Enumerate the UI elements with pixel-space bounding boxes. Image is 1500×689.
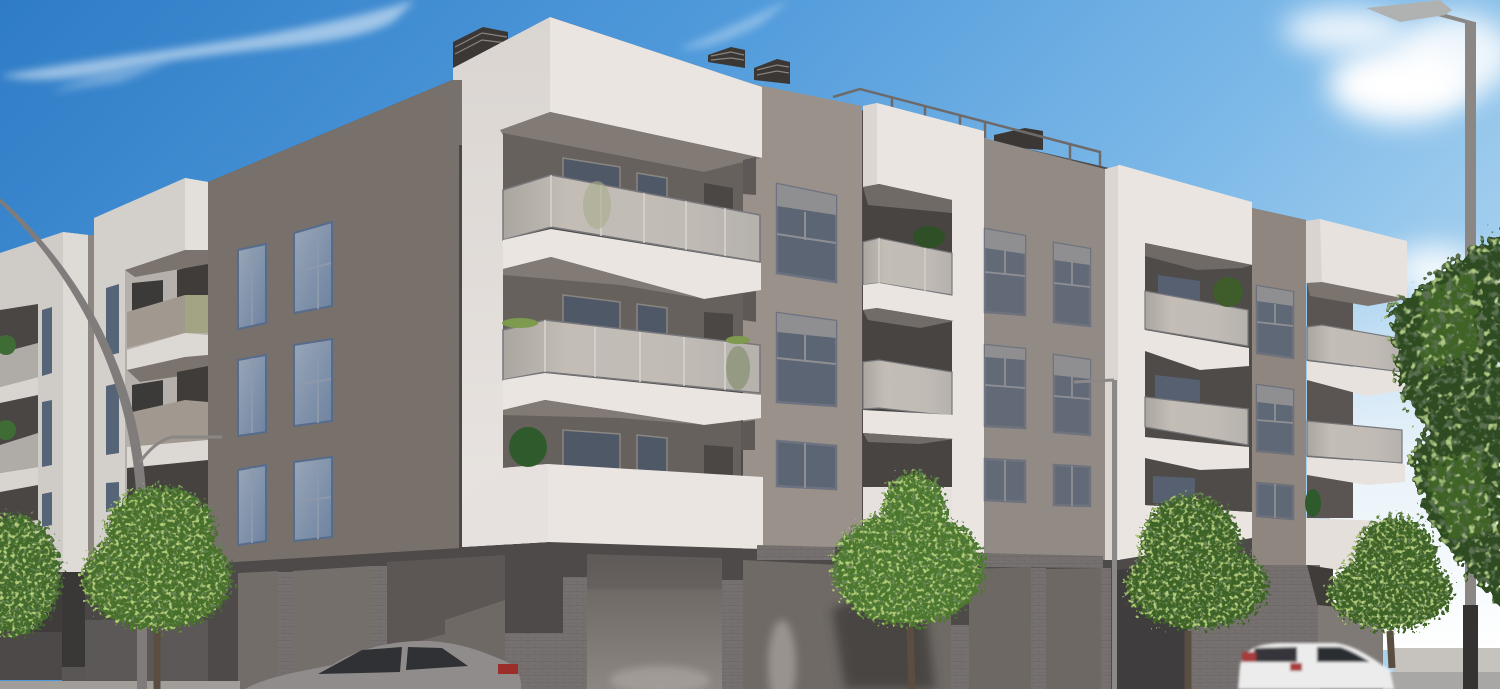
white column and top block xyxy=(453,17,762,548)
icon: balcony plants xyxy=(0,181,750,467)
fourth grey wall xyxy=(1252,208,1306,565)
balcony glass 2 xyxy=(503,320,760,393)
trees xyxy=(0,472,1452,636)
tree: right small xyxy=(1328,516,1452,630)
balcony slab 2 xyxy=(503,373,761,425)
clouds xyxy=(0,0,1500,294)
tree: far left xyxy=(0,514,61,636)
left wing of the building xyxy=(0,178,208,572)
tree trunks xyxy=(157,627,1392,689)
corner balcony volume xyxy=(453,17,763,549)
rooftop vents and railing xyxy=(453,27,1100,166)
balcony windows xyxy=(563,158,667,472)
tree: large foreground right xyxy=(1390,230,1500,610)
white moving car xyxy=(1238,643,1394,689)
building backing mass xyxy=(208,17,1383,689)
balcony glass 1 xyxy=(503,175,760,262)
second grey wall xyxy=(743,82,862,550)
third wall windows xyxy=(985,229,1090,506)
side wall windows xyxy=(238,222,332,545)
wall shadows beside the recesses xyxy=(741,157,756,450)
brick bands and piers xyxy=(278,545,1320,689)
second wall windows xyxy=(777,184,836,489)
tree: centre xyxy=(832,472,984,626)
ground floor base xyxy=(0,545,1500,689)
fourth wall windows xyxy=(1257,286,1293,519)
main side wall xyxy=(208,76,462,562)
door shadows xyxy=(704,183,733,475)
tree: right of centre xyxy=(1126,495,1268,629)
second white balcony column xyxy=(863,103,984,557)
balcony slab 1 xyxy=(503,229,761,299)
left ground floor xyxy=(0,570,238,689)
third white balcony block xyxy=(1105,165,1252,560)
right end balcony block xyxy=(1305,219,1407,570)
third grey wall xyxy=(984,138,1105,560)
garage doors xyxy=(238,571,278,689)
grey parked car xyxy=(245,641,521,689)
bottom white volume xyxy=(462,464,763,549)
balcony recess backs xyxy=(503,133,743,480)
tree: left of lamp xyxy=(82,486,232,630)
